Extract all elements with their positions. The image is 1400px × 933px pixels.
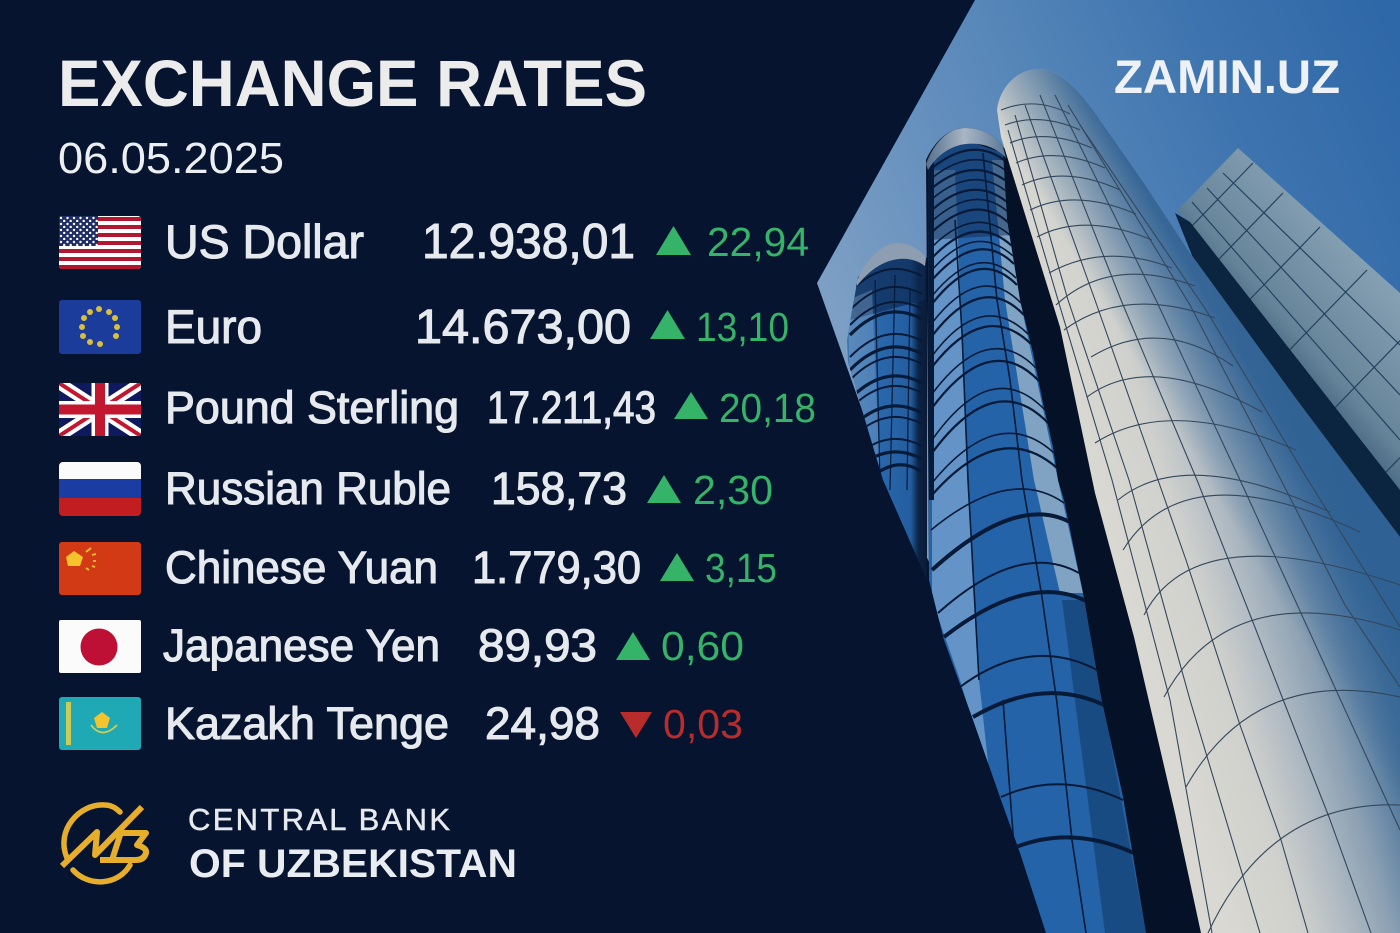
change: 13,10 [696,304,789,350]
bank name [188,802,517,886]
flag: Kazakhstan [59,697,141,750]
currency name: Kazakh Tenge [165,698,449,749]
arrow up [616,632,650,660]
rate: 24,98 [485,698,600,749]
row: Russian Ruble [59,462,773,516]
date: 06.05.2025 [58,134,284,183]
title: EXCHANGE RATES [58,46,647,120]
tall white cylindrical tower [997,69,1400,933]
currency name: Japanese Yen [163,620,440,671]
arrow up [660,553,694,581]
change: 0,60 [661,623,744,669]
row: Pound Sterling [59,382,816,436]
currency name: Chinese Yuan [165,542,438,593]
flag: China [59,542,141,595]
rate: 12.938,01 [422,215,635,269]
arrow up [674,392,708,419]
row: Japanese Yen [59,620,744,673]
change: 20,18 [719,385,816,431]
change: 2,30 [693,467,773,513]
row: Euro [59,300,789,354]
rate: 14.673,00 [415,301,631,354]
rate: 17.211,43 [487,382,656,433]
brand: ZAMIN.UZ: ZAMIN.UZ [1114,50,1340,103]
currency name: Pound Sterling [165,382,459,433]
bank name line 1: CENTRAL BANK [188,802,450,837]
row: Chinese Yuan [59,542,777,595]
currency name: US Dollar [165,215,364,268]
panel: building photo [817,0,1400,933]
change: 22,94 [707,219,809,265]
row: US Dollar [59,215,809,269]
rate: 158,73 [491,463,627,514]
currency name: Russian Ruble [165,463,451,514]
currency name: Euro [165,300,262,353]
small glass tower [847,243,927,580]
row: Kazakh Tenge [59,697,743,750]
middle glass tower [926,128,1149,933]
arrow down [620,712,652,738]
bank name line 2: OF UZBEKISTAN [189,842,517,886]
change: 0,03 [663,701,743,747]
flag: UK [59,383,141,436]
rate: 89,93 [478,620,597,671]
flag: Japan [59,620,141,673]
change: 3,15 [705,545,777,591]
flag: Russia [59,462,141,516]
flag: USA [59,216,141,269]
arrow up [656,226,691,255]
flag: EU [59,300,141,354]
rate: 1.779,30 [472,542,641,593]
arrow up [647,475,681,503]
sky [817,0,1400,700]
rectangular slab tower [1175,148,1400,537]
arrow up [650,310,685,339]
logo: Central Bank mark [62,805,146,882]
